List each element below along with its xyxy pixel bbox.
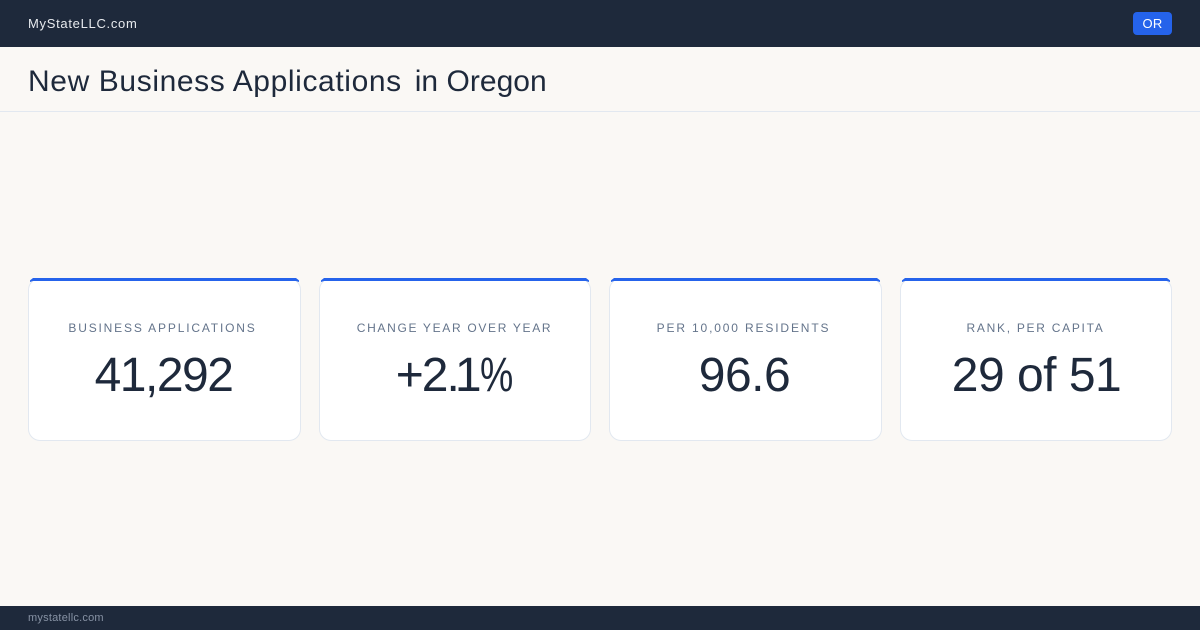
stat card: rank per capita bbox=[900, 278, 1172, 441]
label: per 10,000 residents: PER 10,000 RESIDENTS bbox=[657, 321, 830, 335]
value: +2.1%: +2.1 bbox=[396, 349, 480, 402]
value: +2.1%: % bbox=[480, 349, 511, 402]
stat card: business applications bbox=[28, 278, 301, 441]
label: business applications: BUSINESS APPLICATIONS bbox=[68, 321, 257, 335]
label: rank per capita: RANK, PER CAPITA bbox=[966, 321, 1104, 335]
brand name: MyStateLLC.com bbox=[28, 16, 138, 31]
stat card: change year over year bbox=[319, 278, 591, 441]
footer bar bbox=[0, 606, 1200, 630]
value: 29 of 51: 29 of 51 bbox=[952, 349, 1121, 402]
top navigation bar bbox=[0, 0, 1200, 47]
title: New Business Applications in Oregon bbox=[28, 65, 547, 98]
header band bbox=[0, 47, 1200, 112]
value: 96.6: 96.6 bbox=[699, 349, 790, 402]
value: 41,292: 41,292 bbox=[95, 349, 232, 402]
stat card: per 10,000 residents bbox=[609, 278, 882, 441]
footer text: mystatellc.com bbox=[28, 612, 104, 624]
state badge: OR bbox=[1142, 16, 1163, 31]
state badge bbox=[1133, 12, 1172, 35]
label: change year over year: CHANGE YEAR OVER YEAR bbox=[357, 321, 552, 335]
